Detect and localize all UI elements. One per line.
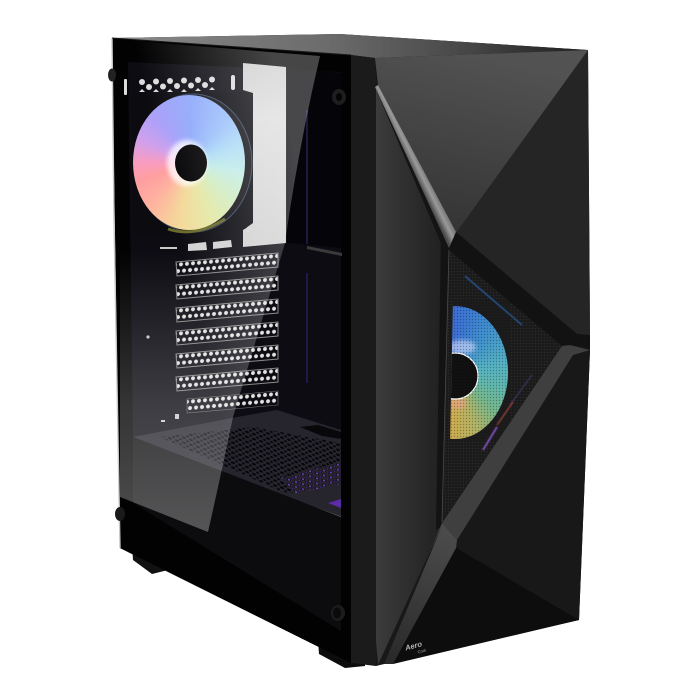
top vent holes xyxy=(124,75,235,95)
slot 1 xyxy=(176,253,278,276)
expansion bracket outline xyxy=(146,247,179,422)
floor perforation xyxy=(160,427,341,494)
foot: left xyxy=(132,545,168,574)
glass reflection: lower xyxy=(120,243,285,532)
upper silver strip xyxy=(375,85,456,248)
glass edge highlight xyxy=(112,38,120,548)
pink tint xyxy=(450,397,466,409)
lower diagonal strip xyxy=(442,345,590,540)
mesh left edge xyxy=(442,250,449,522)
white pill cutouts xyxy=(188,240,232,251)
screw: top right xyxy=(332,89,346,105)
glass side panel xyxy=(108,38,351,663)
slot 5 xyxy=(176,345,278,368)
front fan hub xyxy=(450,352,479,400)
slot 4 xyxy=(176,322,278,345)
lower right facet bottom xyxy=(380,548,579,664)
slot 7 xyxy=(187,391,278,413)
lower glass shroud xyxy=(133,437,341,631)
rear fan xyxy=(133,94,252,232)
mesh texture on fan xyxy=(450,300,510,440)
light streak: blue xyxy=(465,276,522,325)
lower right facet upper xyxy=(450,350,590,620)
slot 2 xyxy=(176,276,278,299)
interior back wall xyxy=(128,62,341,517)
illustration: PC tower case xyxy=(108,34,590,668)
lower silver strip xyxy=(384,523,457,664)
front fan xyxy=(450,301,509,440)
right chamber detail xyxy=(287,68,342,383)
PSU opening xyxy=(300,425,341,439)
fan frame rim xyxy=(134,94,252,232)
case silhouette base xyxy=(112,34,590,666)
PCI slot covers xyxy=(176,253,278,413)
dark diagonal band xyxy=(449,232,590,346)
hub glow xyxy=(167,140,207,186)
brand logo xyxy=(403,639,426,658)
floor front edge xyxy=(220,473,341,517)
foot: right xyxy=(318,640,365,668)
slot 3 xyxy=(176,299,278,322)
fan hub xyxy=(175,144,207,182)
dark channel beside mesh xyxy=(436,238,450,530)
top panel xyxy=(112,34,588,58)
glass top edge xyxy=(112,38,351,55)
case floor xyxy=(133,410,341,517)
front mesh panel xyxy=(442,250,562,522)
upper light facet xyxy=(375,50,588,233)
lower dark edge xyxy=(378,526,442,665)
glass reflection: upper xyxy=(120,40,320,532)
purple light xyxy=(328,499,341,508)
rear panel cutout xyxy=(243,63,286,247)
floor purple glow xyxy=(280,462,341,494)
blade highlight xyxy=(448,340,476,354)
slot 6 xyxy=(176,368,278,391)
brand logo: Cool xyxy=(417,647,426,654)
light streak: red and purple xyxy=(483,375,532,450)
front fan RGB blades xyxy=(450,306,508,439)
screw: bottom right xyxy=(331,605,345,621)
screw: top left xyxy=(108,68,116,82)
brand logo: Aero xyxy=(403,639,423,653)
fan mounting plate xyxy=(132,92,253,235)
upper right facet xyxy=(456,50,590,336)
front left column xyxy=(351,55,378,665)
screw: bottom left xyxy=(115,507,125,521)
front left face xyxy=(376,88,449,665)
fan RGB blades xyxy=(133,95,245,230)
